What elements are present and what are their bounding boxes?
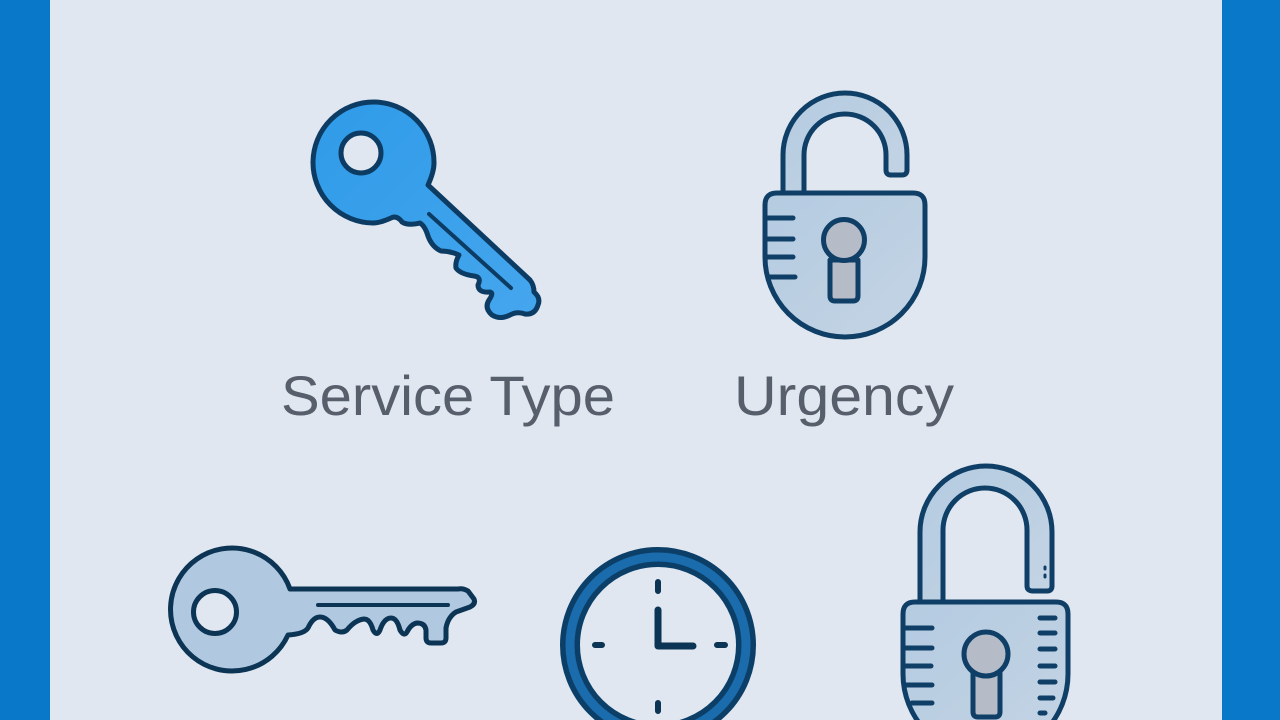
icon: second padlock (903, 466, 1068, 720)
icon: open padlock (765, 93, 925, 337)
left blue border (0, 0, 50, 720)
icon: blue key (313, 102, 539, 318)
right blue border (1222, 0, 1280, 720)
label: Service Type: Service Type (281, 364, 615, 427)
icon: clock (570, 557, 746, 720)
label: Urgency: Urgency (734, 364, 954, 427)
icon: grey-blue key (171, 548, 474, 671)
